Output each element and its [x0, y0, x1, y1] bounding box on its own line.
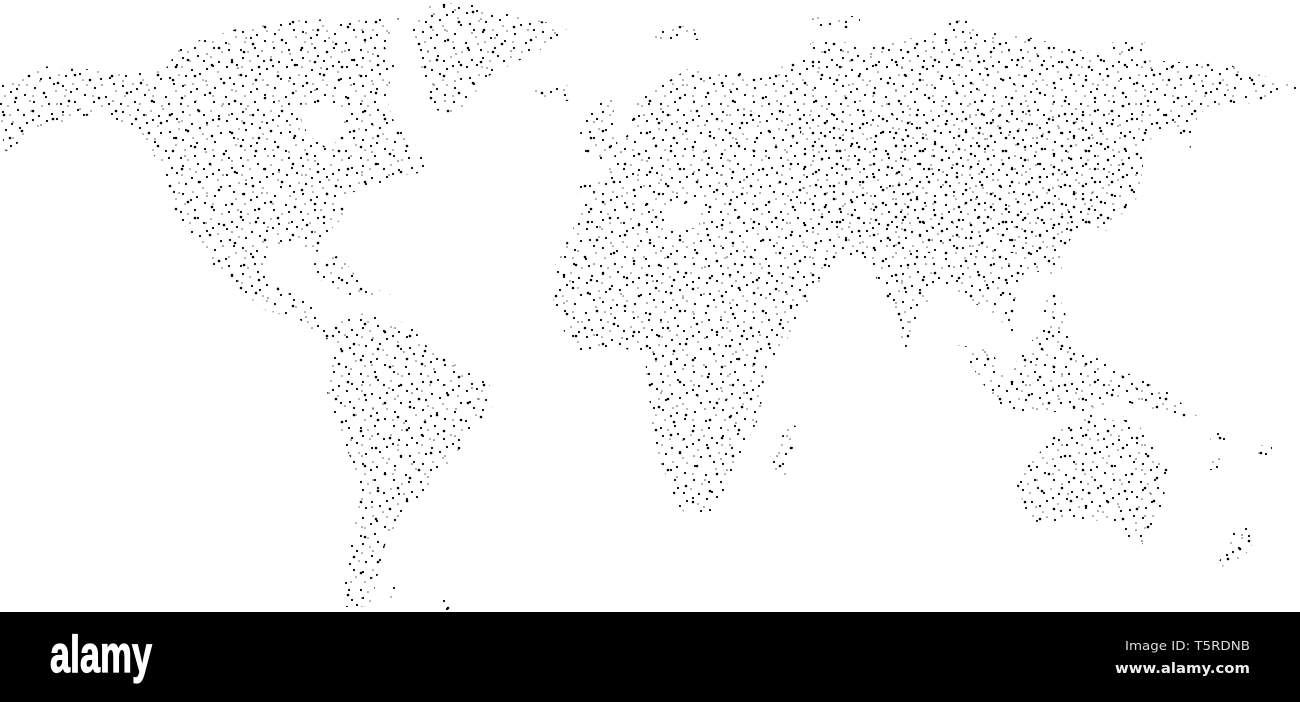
- Madagascar: [766, 422, 798, 478]
- image id: Image ID: T5RDNB: [1125, 638, 1250, 653]
- Indonesia and Philippines: [1010, 288, 1205, 422]
- Iceland: [530, 85, 572, 101]
- New Zealand: [1216, 518, 1262, 568]
- Africa and Eurasia: [553, 30, 1300, 520]
- website: www.alamy.com: [1115, 661, 1250, 677]
- Australia: [1015, 413, 1168, 548]
- South America: [325, 312, 492, 607]
- Caribbean: [312, 255, 393, 295]
- dense dots over central Asia: [800, 103, 1130, 253]
- Arctic and Pacific islands: [380, 16, 1272, 610]
- North America: [0, 18, 430, 340]
- footer bar: [0, 612, 1300, 702]
- Sumatra and Malaya: [958, 345, 1020, 410]
- Greenland: [412, 3, 568, 116]
- alamy logo: alamy: [50, 626, 152, 684]
- British Isles and Scandinavia: [576, 98, 618, 165]
